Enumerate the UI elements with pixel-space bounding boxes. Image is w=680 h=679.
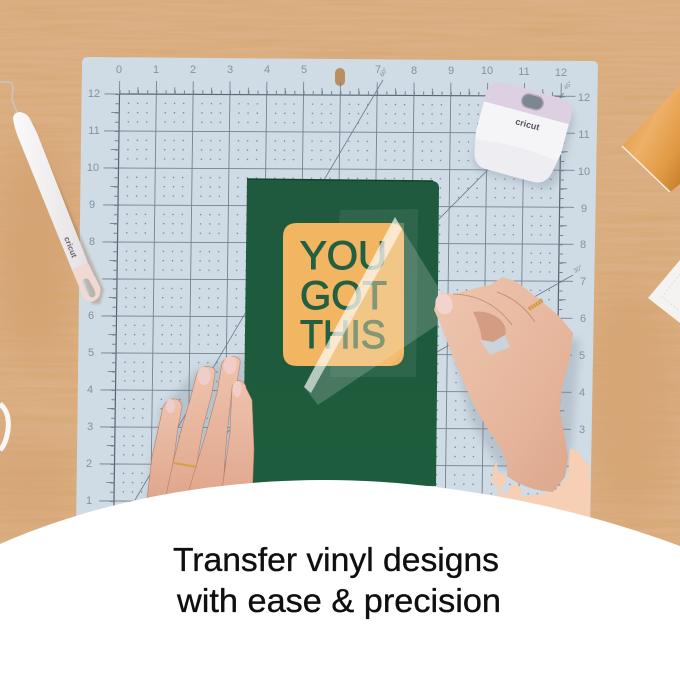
left ruler numbers: 6 [88,310,94,322]
right hand [433,277,573,492]
left ruler numbers: 10 [87,162,99,174]
top ruler numbers: 12 [555,67,567,79]
right ruler numbers: 3 [579,424,585,436]
top ruler numbers: 9 [448,65,454,77]
left hand shadow [146,355,262,500]
weeder logo: cricut [62,235,79,259]
top ruler numbers: 10 [481,65,493,77]
left ruler numbers: 4 [87,384,93,396]
book cover [243,179,439,486]
angle labels [380,67,584,275]
angle guide lines [135,80,573,500]
white paper sheet [648,260,680,323]
top ruler numbers: 11 [518,66,530,78]
left ruler numbers: 9 [89,199,95,211]
angle labels: 60° [380,67,390,78]
headline [173,541,501,619]
weeding tool [0,82,104,304]
top ruler numbers: 0 [116,64,122,76]
left ruler numbers: 2 [86,458,92,470]
top ruler numbers: 2 [190,64,196,76]
top ruler numbers: 3 [227,64,233,76]
weeder shadow [30,120,104,304]
scraper tool [466,79,579,192]
left ruler numbers: 8 [89,236,95,248]
angle labels: 45° [563,80,574,91]
right ruler numbers: 10 [578,166,590,178]
peeled transfer tape [304,217,440,405]
pinky finger [147,399,182,500]
mat board [76,57,598,530]
roll body [622,85,680,192]
vinyl slogan [300,234,387,357]
scissors handle [0,404,8,450]
right ruler numbers: 6 [580,313,586,325]
headline: with ease & precision [176,582,501,619]
right ruler numbers: 9 [581,203,587,215]
top ruler numbers: 1 [153,64,159,76]
ring finger [165,367,215,500]
right ruler numbers: 12 [578,92,590,104]
left ruler numbers: 11 [88,125,100,137]
left ruler numbers: 3 [87,421,93,433]
right ruler numbers: 8 [580,239,586,251]
top ruler numbers: 7 [375,64,381,76]
vinyl label [283,223,404,366]
left ruler numbers [86,88,100,507]
white curved panel [0,480,680,679]
left ruler numbers: 5 [88,347,94,359]
weeder hook [0,82,17,112]
scraper shadow [470,86,577,192]
scrunchie cuff [492,448,590,530]
roll edge highlight [622,146,670,192]
top ruler numbers: 5 [301,64,307,76]
cutting mat [76,57,598,540]
vinyl slogan: THIS [300,313,386,357]
vinyl slogan: GOT [300,274,387,318]
transfer tape tint over label [318,223,404,366]
headline: Transfer vinyl designs [173,541,499,578]
right ruler numbers: 5 [579,350,585,362]
angle labels: 30° [573,265,584,275]
left hand [147,356,254,500]
notebook [243,179,440,486]
scraper slot [520,92,545,112]
index finger crease [453,292,535,325]
right ruler numbers: 7 [580,276,586,288]
gold vinyl roll [622,85,680,192]
weeder pink handle [72,263,100,302]
gold ring [529,300,543,309]
top ruler numbers [116,64,567,79]
tape fold highlight [304,217,402,393]
finger nails [166,356,242,413]
mat hanging hole [335,68,345,86]
hand shape [434,277,573,492]
weeder body [13,112,88,270]
right ruler numbers [578,92,590,473]
scraper blade [469,136,558,187]
curled finger shadow [473,312,506,342]
middle finger [186,356,240,500]
finger gap [480,335,510,355]
scraper logo: cricut [514,116,541,132]
right ruler numbers: 4 [579,387,585,399]
tape residue square [330,209,418,377]
index finger [220,381,254,500]
thumb nail [433,292,455,316]
wedding ring [174,463,197,467]
scraper body [467,79,575,187]
book edge shadow [247,179,433,181]
right ruler numbers: 2 [578,461,584,473]
right ruler numbers: 11 [578,129,590,141]
top ruler numbers: 4 [264,64,270,76]
top ruler numbers: 8 [411,65,417,77]
mat grid [99,81,576,540]
left ruler numbers: 1 [86,495,92,507]
vinyl slogan: YOU [300,234,387,278]
left ruler numbers: 12 [88,88,100,100]
left ruler numbers: 7 [89,273,95,285]
right hand shadow [445,320,580,470]
scraper lilac top [484,79,575,124]
